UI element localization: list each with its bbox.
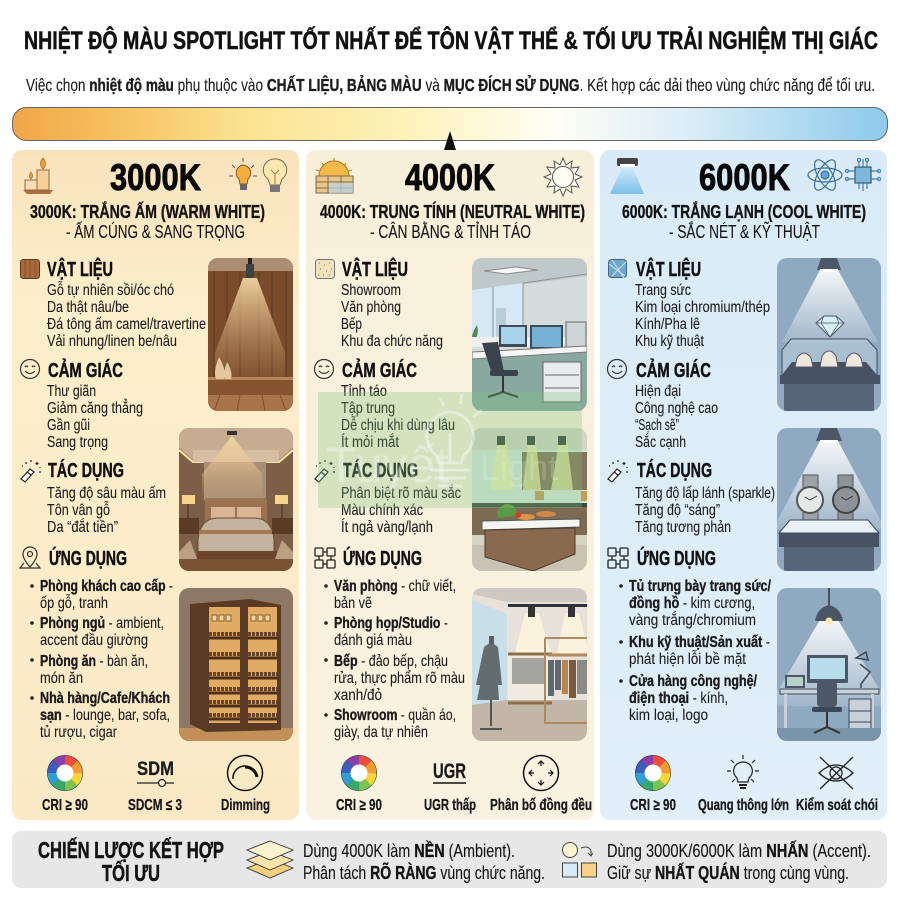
icon: light bulbs (229, 158, 287, 192)
panel: 4000K neutral white (306, 150, 594, 820)
section: ứng dụng: Phòng ngủ - ambient, (40, 615, 164, 632)
section: ứng dụng: vàng trắng/chromium (629, 610, 756, 629)
image: jewellery case (777, 258, 881, 411)
section: tác dụng: Ít ngả vàng/lạnh (341, 517, 433, 536)
section: tác dụng (47, 459, 166, 536)
icon: flashlight (21, 460, 41, 482)
4000K heading: 4000K (405, 157, 495, 198)
section: tác dụng (635, 459, 775, 536)
spec: UGR: UGR (433, 760, 466, 783)
section: ứng dụng (619, 546, 771, 724)
watermark: Light (480, 447, 558, 488)
icon: sun (544, 158, 582, 196)
watermark: Tuyết (326, 437, 449, 493)
spec: CRI: CRI ≥ 90 (630, 797, 676, 814)
4000K subtitle: 4000K: TRUNG TÍNH (NEUTRAL WHITE) (320, 201, 585, 222)
panel: 3000K warm white (12, 150, 299, 820)
section: ứng dụng: phát hiện lỗi bề mặt (629, 649, 746, 668)
section: vật liệu (47, 257, 206, 350)
section: vật liệu: VẬT LIỆU (47, 257, 113, 281)
spec: glare control (796, 757, 878, 814)
section: ứng dụng (324, 546, 465, 741)
image: bedroom (179, 428, 293, 571)
strategy panel (12, 831, 887, 888)
watermark (318, 392, 582, 508)
strategy heading: CHIẾN LƯỢC KẾT HỢP (38, 836, 224, 863)
spec: CRI (336, 755, 382, 814)
section: tác dụng: Màu chính xác (341, 502, 423, 519)
section: vật liệu: Trang sức (635, 282, 691, 299)
3000K subtitle (30, 201, 265, 242)
section: ứng dụng: Khu kỹ thuật/Sản xuất - (629, 634, 770, 651)
section: tác dụng: TÁC DỤNG (48, 459, 124, 482)
spec: SDCM (128, 759, 182, 814)
section: tác dụng: Tăng độ lấp lánh (sparkle) (635, 485, 775, 502)
image: wine cabinet (179, 588, 293, 741)
strategy heading (38, 836, 224, 886)
spec: luminous flux: Quang thông lớn (698, 797, 789, 814)
section: vật liệu: Khu đa chức năng (341, 333, 443, 350)
icon: location pin (20, 547, 40, 568)
icon: grid (315, 548, 335, 568)
icon: chip (846, 158, 880, 191)
icon: flashlight (315, 460, 335, 482)
strategy text: ambient: Phân tách RÕ RÀNG vùng chức năng. (303, 862, 545, 883)
spec: SDCM: SDCM ≤ 3 (128, 797, 182, 814)
pointer triangle on bar (444, 131, 456, 150)
icon: sun and solar panel (316, 158, 353, 193)
spec: UGR (424, 760, 476, 814)
section: tác dụng: Phân biệt rõ màu sắc (341, 483, 461, 502)
section: ứng dụng: Phòng họp/Studio - (334, 615, 448, 632)
section: ứng dụng: Tủ trưng bày trang sức/ (629, 578, 771, 595)
image: kitchen (472, 428, 587, 571)
section: ứng dụng: Văn phòng - chữ viết, (334, 578, 456, 595)
image: office (472, 258, 587, 411)
icon: stone texture (316, 260, 334, 278)
section: tác dụng: Tăng độ sâu màu ấm (47, 485, 166, 502)
image: office desk (777, 588, 881, 741)
icon: grid (608, 548, 628, 568)
section: ứng dụng: đánh giá màu (334, 632, 412, 649)
section: ứng dụng: đồng hồ - kim cương, (629, 595, 755, 612)
section: cảm giác: Sắc cạnh (635, 432, 686, 451)
section: cảm giác: Dễ chịu khi dùng lâu (341, 415, 455, 434)
section: ứng dụng: kim loại, logo (629, 707, 708, 724)
section: ứng dụng: ốp gỗ, tranh (40, 593, 108, 612)
section: tác dụng: Tôn vân gỗ (47, 500, 110, 519)
section: ứng dụng: Phòng khách cao cấp - (40, 578, 173, 595)
3000K subtitle: - ẤM CÚNG & SANG TRỌNG (66, 221, 245, 242)
section: ứng dụng: Showroom - quần áo, (334, 707, 456, 724)
spec: even distribution (490, 756, 592, 814)
icon: layers (247, 841, 293, 878)
section: tác dụng (341, 459, 461, 536)
section: vật liệu (635, 257, 770, 350)
spec: dimming: Dimming (221, 797, 270, 814)
spec: dimming (221, 756, 270, 814)
spec: SDCM: SDM (137, 759, 174, 780)
spec: CRI (42, 755, 88, 814)
section: ứng dụng: điện thoại - kính, (629, 690, 728, 707)
section: ứng dụng: rửa, thực phẩm rõ màu (334, 669, 465, 687)
section: cảm giác: Tỉnh táo (341, 383, 387, 400)
section: vật liệu: Vải nhung/linen be/nâu (47, 333, 177, 350)
icon: candles (23, 158, 53, 194)
section: ứng dụng (30, 546, 173, 741)
section: ứng dụng: tủ rượu, cigar (40, 724, 118, 741)
section: tác dụng: Tăng tương phản (635, 519, 731, 536)
section: ứng dụng: ỨNG DỤNG (49, 546, 127, 570)
strategy heading: TỐI ƯU (102, 859, 160, 886)
section: vật liệu: Da thật nâu/be (47, 299, 129, 316)
spec: luminous flux (698, 755, 789, 814)
icon: crystal texture (608, 260, 626, 278)
6000K subtitle (622, 201, 866, 242)
section: cảm giác: CẢM GIÁC (342, 359, 417, 382)
icon: ceiling light (610, 158, 644, 194)
colour temperature gradient bar (12, 108, 888, 140)
strategy text: accent: Giữ sự NHẤT QUÁN trong cùng vùng. (607, 862, 849, 883)
icon: wood material (20, 260, 40, 278)
4000K subtitle (320, 201, 585, 242)
section: ứng dụng: bản vẽ (334, 595, 372, 612)
section: ứng dụng: món ăn (40, 670, 83, 687)
icon: accent swatches (562, 842, 596, 877)
section: cảm giác (47, 359, 143, 451)
section: ứng dụng: Phòng ăn - bàn ăn, (40, 653, 148, 670)
spec: CRI (630, 755, 676, 814)
section: cảm giác: Gần gũi (47, 417, 90, 434)
strategy text: ambient (303, 840, 545, 883)
section: cảm giác: Sang trọng (47, 434, 108, 451)
section: vật liệu: VẬT LIỆU (636, 257, 701, 281)
section: vật liệu: Khu kỹ thuật (635, 333, 704, 350)
section: ứng dụng: sạn - lounge, bar, sofa, (40, 707, 170, 724)
strategy text: accent (607, 840, 871, 883)
section: ứng dụng: Nhà hàng/Cafe/Khách (40, 690, 170, 707)
section: ứng dụng: accent đầu giường (40, 632, 148, 649)
section: cảm giác: Tập trung (341, 400, 395, 417)
spec: CRI: CRI ≥ 90 (336, 797, 382, 814)
strategy text: ambient: Dùng 4000K làm NỀN (Ambient). (303, 840, 515, 861)
section: ứng dụng: ỨNG DỤNG (343, 546, 422, 570)
section: cảm giác: Thư giãn (47, 383, 96, 400)
section: cảm giác (635, 359, 718, 451)
image: boutique (472, 588, 589, 741)
section: vật liệu: Văn phòng (341, 299, 401, 316)
icon: smile (608, 360, 626, 378)
section: cảm giác: “Sạch sẽ” (635, 417, 679, 434)
section: vật liệu: Đá tông ấm camel/travertine (47, 316, 206, 333)
section: cảm giác: Ít mỏi mắt (341, 432, 399, 451)
section: cảm giác: Giảm căng thẳng (47, 398, 143, 417)
section: cảm giác: CẢM GIÁC (636, 359, 711, 382)
image: watches (777, 428, 881, 571)
section: cảm giác: Hiện đại (635, 383, 681, 400)
6000K heading: 6000K (699, 157, 790, 198)
spec: CRI: CRI ≥ 90 (42, 797, 88, 814)
image: wood wall spotlight (208, 258, 293, 411)
icon: smile (20, 360, 40, 378)
strategy text: accent: Dùng 3000K/6000K làm NHẤN (Accent). (607, 840, 871, 861)
icon: smile (314, 360, 334, 378)
section: tác dụng: TÁC DỤNG (637, 459, 712, 482)
3000K heading: 3000K (110, 157, 201, 198)
section: cảm giác: CẢM GIÁC (48, 359, 123, 382)
section: tác dụng: Tăng độ “sáng” (635, 502, 720, 519)
spec: even distribution: Phân bố đồng đều (490, 797, 592, 814)
section: ứng dụng: Cửa hàng công nghệ/ (629, 673, 757, 690)
section: vật liệu: Bếp (341, 316, 362, 333)
section: vật liệu: Kim loại chromium/thép (635, 299, 770, 316)
section: tác dụng: TÁC DỤNG (343, 459, 418, 482)
section: vật liệu: Showroom (341, 282, 401, 299)
section: ứng dụng: xanh/đỏ (334, 687, 382, 704)
6000K subtitle: - SẮC NÉT & KỸ THUẬT (669, 221, 820, 242)
icon: atom (808, 157, 842, 193)
section: vật liệu: Gỗ tự nhiên sồi/óc chó (47, 280, 174, 299)
panel: 6000K cool white (600, 150, 887, 820)
4000K subtitle: - CÂN BẰNG & TỈNH TÁO (370, 221, 531, 242)
section: ứng dụng: ỨNG DỤNG (637, 546, 716, 570)
section: cảm giác: Công nghệ cao (635, 400, 718, 417)
spec: UGR: UGR thấp (424, 797, 476, 814)
section: cảm giác (341, 359, 455, 451)
section: ứng dụng: giày, da tự nhiên (334, 724, 428, 741)
section: vật liệu: Kính/Pha lê (635, 316, 700, 333)
section: tác dụng: Da “đắt tiền” (47, 517, 118, 536)
section: ứng dụng: Bếp - đảo bếp, chậu (334, 653, 448, 670)
section: vật liệu (341, 257, 443, 350)
3000K subtitle: 3000K: TRẮNG ẤM (WARM WHITE) (30, 201, 265, 222)
icon: flashlight (608, 460, 628, 482)
section: vật liệu: VẬT LIỆU (342, 257, 408, 281)
